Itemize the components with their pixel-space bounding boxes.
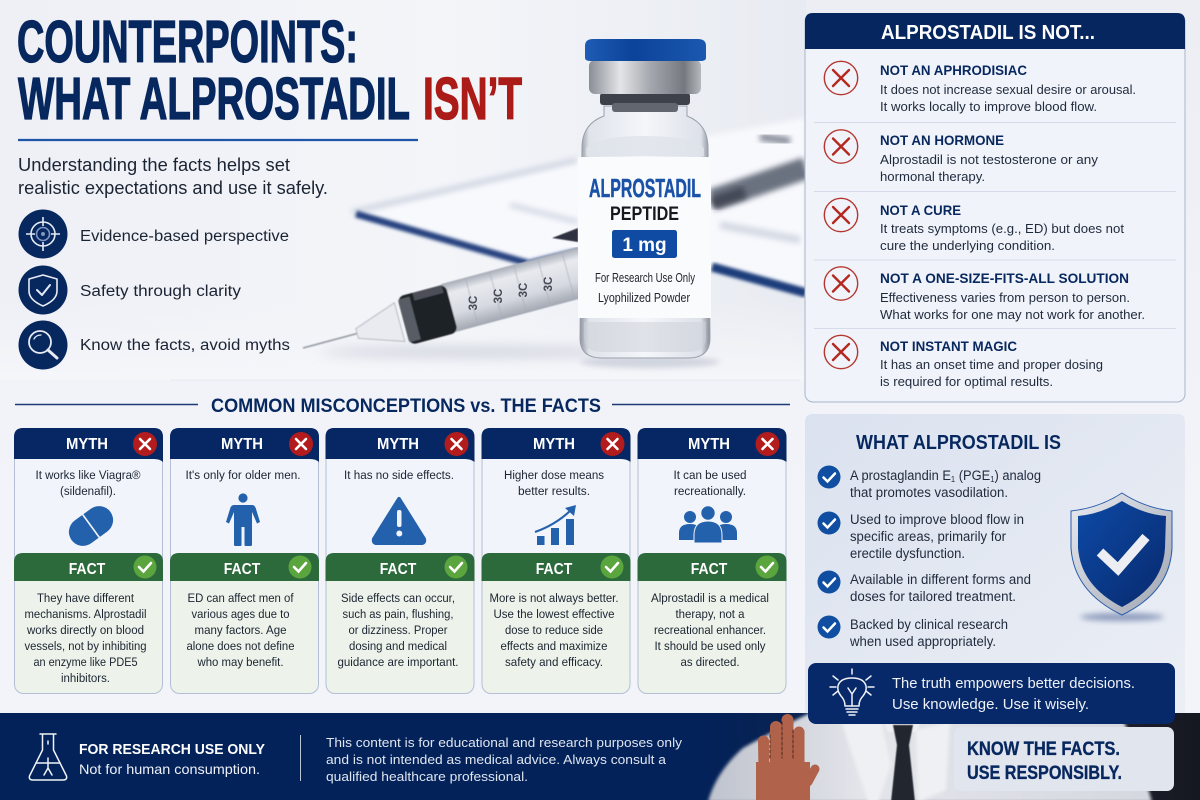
callout: the truth empowers: The truth empowers better decisions. bbox=[892, 675, 1135, 692]
icon: flask bbox=[29, 734, 67, 780]
footer research text: Not for human consumption. bbox=[79, 761, 260, 777]
card 4: higher dose myth: FACT bbox=[536, 561, 572, 578]
icon: magnifier bbox=[29, 331, 57, 358]
item: not one-size-fits-all: NOT A ONE-SIZE-FITS-ALL SOLUTION bbox=[880, 270, 1129, 286]
item: not instant magic: It has an onset time and proper dosing bbox=[880, 357, 1103, 372]
callout: know the facts: USE RESPONSIBLY. bbox=[967, 763, 1122, 784]
hero photo: vial, syringe and clipboard bbox=[0, 0, 806, 380]
fact text: safety and efficacy. bbox=[505, 655, 603, 669]
fact text: works directly on blood bbox=[26, 623, 144, 637]
item: not a hormone: hormonal therapy. bbox=[880, 169, 985, 184]
item: not an aphrodisiac: NOT AN APHRODISIAC bbox=[880, 62, 1027, 78]
fact text: recreational enhancer. bbox=[654, 623, 766, 637]
fact text bbox=[24, 591, 146, 685]
subtitle: realistic expectations and use it safely. bbox=[18, 178, 328, 198]
item: not an aphrodisiac bbox=[824, 61, 1136, 114]
item: clinical research: Backed by clinical research bbox=[850, 617, 1008, 632]
item: not one-size-fits-all bbox=[824, 267, 1145, 322]
card 3: side effects myth: MYTH bbox=[377, 436, 419, 453]
card 2: older men myth bbox=[170, 428, 319, 694]
footer band bbox=[0, 713, 1200, 800]
vial label text bbox=[589, 173, 701, 305]
vial label text: PEPTIDE bbox=[610, 203, 679, 225]
icon: fact check bbox=[600, 556, 624, 578]
card 5: recreational myth: MYTH bbox=[688, 436, 730, 453]
icon: light bulb bbox=[830, 669, 874, 715]
item: not instant magic: is required for optimal results. bbox=[880, 374, 1053, 389]
card 4: higher dose myth bbox=[482, 428, 630, 694]
icon: person bbox=[226, 493, 260, 546]
card 4: higher dose myth: Higher dose means bbox=[504, 468, 604, 482]
card 5: recreational myth: recreationally. bbox=[674, 484, 746, 498]
fact text: as directed. bbox=[680, 655, 740, 669]
item: prostaglandin: A prostaglandin E bbox=[850, 468, 956, 483]
card 5: recreational myth: It can be used bbox=[674, 468, 746, 482]
item: prostaglandin bbox=[818, 466, 1041, 500]
disclaimer bbox=[326, 735, 683, 784]
title: ISN’T bbox=[423, 66, 522, 132]
panel: what Alprostadil is: WHAT ALPROSTADIL IS bbox=[856, 432, 1061, 454]
syringe graduations: 3C bbox=[543, 277, 555, 291]
icon: myth cross bbox=[444, 432, 468, 456]
fact text: effects and maximize bbox=[500, 639, 608, 653]
item: prostaglandin: (PGE bbox=[955, 468, 990, 483]
syringe graduations bbox=[468, 277, 555, 310]
item: not a cure bbox=[824, 198, 1124, 253]
title bbox=[17, 9, 522, 132]
benefit: evidence-based: Evidence-based perspective bbox=[80, 228, 289, 245]
callout: know the facts: KNOW THE FACTS. bbox=[967, 739, 1120, 760]
panel: Alprostadil is not: ALPROSTADIL IS NOT... bbox=[881, 22, 1095, 44]
card 4: higher dose myth: MYTH bbox=[533, 436, 575, 453]
card 2: older men myth: It's only for older men. bbox=[186, 468, 300, 482]
item: blood flow bbox=[818, 512, 1024, 561]
card 5: recreational myth: FACT bbox=[691, 561, 727, 578]
fact text: an enzyme like PDE5 bbox=[34, 655, 138, 669]
subtitle bbox=[18, 155, 328, 198]
panel: Alprostadil is not bbox=[805, 13, 1185, 402]
syringe graduations: 3C bbox=[468, 296, 480, 310]
item: blood flow: erectile dysfunction. bbox=[850, 546, 965, 561]
fact text: dose to reduce side bbox=[505, 623, 603, 637]
disclaimer: This content is for educational and research purposes only bbox=[326, 735, 683, 750]
icon: rising bar chart bbox=[535, 505, 576, 545]
icon: myth cross bbox=[133, 432, 157, 456]
item: not a cure: NOT A CURE bbox=[880, 202, 961, 218]
card 2: older men myth: FACT bbox=[224, 561, 260, 578]
item: forms and doses: Available in different forms and bbox=[850, 572, 1031, 587]
item: forms and doses: doses for tailored treatment. bbox=[850, 589, 1016, 604]
item: not one-size-fits-all: Effectiveness varies from person to person. bbox=[880, 290, 1130, 305]
icon: warning triangle bbox=[374, 499, 424, 543]
fact text: Alprostadil is a medical bbox=[651, 591, 769, 605]
fact text: guidance are important. bbox=[338, 655, 458, 669]
fact text: dosing and medical bbox=[349, 639, 447, 653]
card 5: recreational myth bbox=[638, 428, 786, 694]
card 4: higher dose myth: better results. bbox=[518, 484, 590, 498]
item: not a cure: It treats symptoms (e.g., ED) but does not bbox=[880, 221, 1124, 236]
item: not an aphrodisiac: It works locally to improve blood flow. bbox=[880, 99, 1097, 114]
icon: fact check bbox=[444, 556, 468, 578]
item: not a hormone bbox=[824, 130, 1099, 184]
vial label text: Lyophilized Powder bbox=[598, 290, 691, 305]
photo: doctor raising a hand bbox=[708, 712, 1152, 800]
benefit: evidence-based bbox=[18, 210, 289, 258]
item: blood flow: specific areas, primarily for bbox=[850, 529, 1006, 544]
fact text: alone does not define bbox=[186, 639, 295, 653]
subtitle: Understanding the facts helps set bbox=[18, 155, 290, 175]
disclaimer: qualified healthcare professional. bbox=[326, 769, 528, 784]
icon: fact check bbox=[756, 556, 778, 578]
card 2: older men myth: MYTH bbox=[221, 436, 263, 453]
benefit: safety bbox=[18, 266, 241, 314]
card 1: Viagra myth: It works like Viagra® bbox=[36, 468, 141, 482]
benefit: know the facts bbox=[18, 320, 290, 370]
fact text: vessels, not by inhibiting bbox=[24, 639, 146, 653]
fact text: More is not always better. bbox=[490, 591, 618, 605]
card 1: Viagra myth: MYTH bbox=[66, 436, 108, 453]
item: prostaglandin: 1 bbox=[990, 475, 995, 484]
vial bbox=[578, 39, 711, 358]
item: prostaglandin: 1 bbox=[951, 475, 956, 484]
fact text: such as pain, flushing, bbox=[342, 607, 454, 621]
icon: myth cross bbox=[600, 432, 624, 456]
syringe graduations: 3C bbox=[493, 289, 505, 303]
fact text: Use the lowest effective bbox=[494, 607, 615, 621]
card 1: Viagra myth: (sildenafil). bbox=[60, 484, 116, 498]
footer research text: FOR RESEARCH USE ONLY bbox=[79, 742, 265, 758]
card 3: side effects myth: It has no side effects. bbox=[344, 468, 454, 482]
icon: myth cross bbox=[289, 432, 313, 456]
benefit: safety: Safety through clarity bbox=[80, 283, 241, 300]
icon: shield bbox=[29, 275, 57, 306]
fact text: ED can affect men of bbox=[188, 591, 294, 605]
icon: raised hand bbox=[756, 720, 815, 800]
callout: the truth empowers: Use knowledge. Use it wisely. bbox=[892, 696, 1089, 713]
icon: target bbox=[26, 217, 60, 251]
fact text: or dizziness. Proper bbox=[348, 623, 448, 637]
item: not instant magic bbox=[824, 335, 1103, 389]
panel: what Alprostadil is bbox=[805, 414, 1185, 713]
vial label text: 1 mg bbox=[622, 235, 667, 256]
item: prostaglandin: ) analog bbox=[994, 468, 1041, 483]
item: blood flow: Used to improve blood flow in bbox=[850, 512, 1024, 527]
syringe graduations: 3C bbox=[518, 283, 530, 297]
fact text: inhibitors. bbox=[61, 671, 110, 685]
benefit: know the facts: Know the facts, avoid myths bbox=[80, 337, 290, 354]
card 3: side effects myth: FACT bbox=[380, 561, 416, 578]
icon: shield with check bbox=[1071, 493, 1172, 621]
item: not a cure: cure the underlying condition. bbox=[880, 238, 1055, 253]
footer research text bbox=[79, 742, 265, 777]
fact text bbox=[186, 591, 295, 669]
blurred clipboard bbox=[352, 118, 806, 293]
icon: group of people bbox=[679, 506, 737, 543]
item: not a hormone: NOT AN HORMONE bbox=[880, 132, 1004, 148]
item: not one-size-fits-all: What works for one may not work for another. bbox=[880, 307, 1145, 322]
card 1: Viagra myth: FACT bbox=[69, 561, 105, 578]
fact text: many factors. Age bbox=[194, 623, 287, 637]
callout: the truth empowers bbox=[808, 663, 1175, 724]
syringe bbox=[296, 245, 599, 372]
fact text: mechanisms. Alprostadil bbox=[24, 607, 146, 621]
icon: pill bbox=[63, 500, 119, 552]
item: not an aphrodisiac: It does not increase sexual desire or arousal. bbox=[880, 82, 1136, 97]
item: clinical research: when used appropriately. bbox=[849, 634, 996, 649]
item: clinical research bbox=[818, 616, 1008, 649]
section heading: common misconceptions: COMMON MISCONCEPTIONS vs. THE FACTS bbox=[211, 396, 601, 417]
vial label text: ALPROSTADIL bbox=[589, 173, 701, 203]
fact text: who may benefit. bbox=[197, 655, 284, 669]
fact text: They have different bbox=[37, 591, 135, 605]
title: WHAT ALPROSTADIL bbox=[18, 66, 410, 132]
icon: myth cross bbox=[756, 432, 780, 456]
disclaimer: and is not intended as medical advice. Always consult a bbox=[326, 752, 667, 767]
fact text: therapy, not a bbox=[676, 607, 745, 621]
callout: know the facts bbox=[954, 727, 1174, 791]
item: not a hormone: Alprostadil is not testosterone or any bbox=[880, 152, 1099, 167]
icon: fact check bbox=[288, 556, 312, 578]
icon: fact check bbox=[134, 556, 156, 578]
fact text bbox=[338, 591, 458, 669]
item: forms and doses bbox=[818, 570, 1031, 604]
card 1: Viagra myth bbox=[14, 428, 163, 694]
fact text bbox=[651, 591, 769, 669]
fact text: various ages due to bbox=[192, 607, 290, 621]
fact text bbox=[490, 591, 618, 669]
item: prostaglandin: that promotes vasodilation. bbox=[850, 485, 1008, 500]
fact text: Side effects can occur, bbox=[341, 591, 455, 605]
fact text: It should be used only bbox=[654, 639, 766, 653]
card 3: side effects myth bbox=[326, 428, 474, 694]
vial label text: For Research Use Only bbox=[595, 270, 695, 285]
title: COUNTERPOINTS: bbox=[17, 9, 358, 75]
item: not instant magic: NOT INSTANT MAGIC bbox=[880, 338, 1017, 354]
